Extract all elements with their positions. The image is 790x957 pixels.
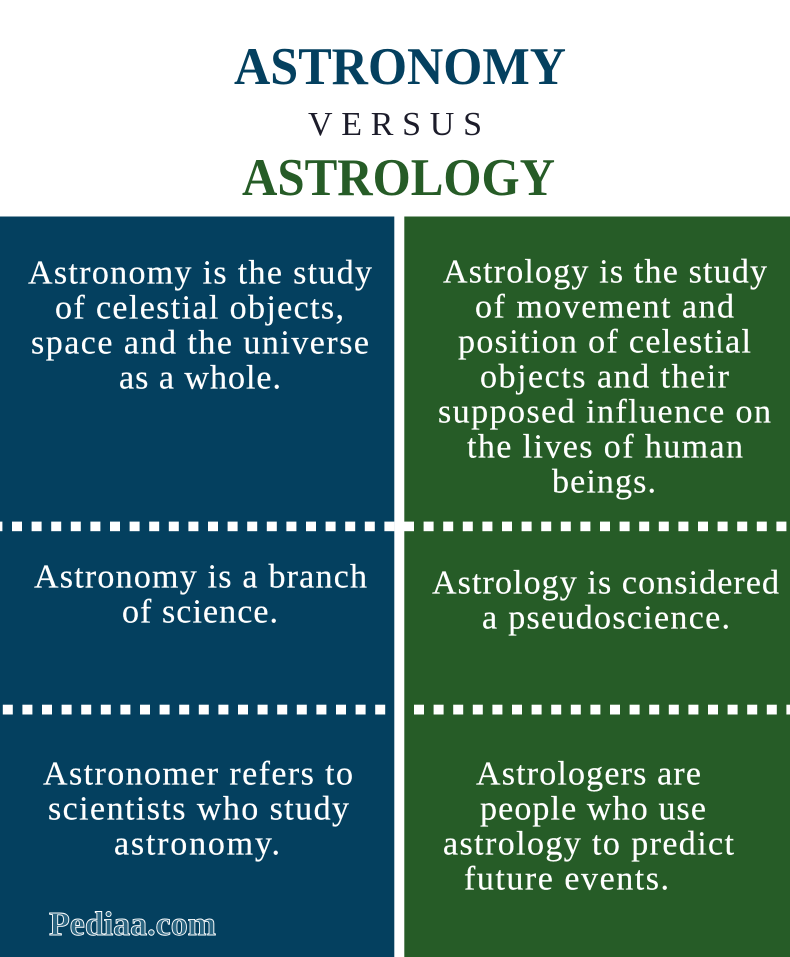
text: astrologer description: future events. <box>464 861 669 898</box>
text: astronomer description: scientists who study <box>48 791 349 828</box>
text: astrologer description: people who use <box>480 791 706 828</box>
text: astronomy definition: as a whole. <box>119 360 281 397</box>
text: astronomer description: Astronomer refers to <box>43 756 353 793</box>
heading: astronomy: ASTRONOMY <box>234 38 566 96</box>
heading: astrology: ASTROLOGY <box>242 149 555 207</box>
text: astronomer description <box>43 756 353 863</box>
text: astrology definition: position of celestial <box>458 324 751 361</box>
text: astronomy is science <box>34 559 367 631</box>
text: astrology definition: supposed influence on <box>438 394 771 431</box>
panel: astronomy column <box>0 216 394 957</box>
text: astronomy is science: of science. <box>122 594 278 631</box>
text: astrology is pseudoscience: a pseudoscience. <box>482 600 730 637</box>
text: astronomy definition <box>28 255 372 397</box>
text: astrology definition: Astrology is the study <box>443 254 767 291</box>
text: astrology is pseudoscience <box>432 565 779 637</box>
dotted divider: lower row <box>3 705 790 714</box>
text: astrologer description <box>443 756 735 898</box>
text: astronomy is science: Astronomy is a branch <box>34 559 367 596</box>
text: astrology definition: objects and their <box>480 359 730 396</box>
text: astrology definition: of movement and <box>475 289 734 326</box>
text: astrology definition: the lives of human <box>467 429 743 466</box>
text: astrologer description: astrology to predict <box>443 826 735 863</box>
text: astrology definition: beings. <box>552 464 656 501</box>
text: astronomy definition: of celestial objects, <box>55 290 344 327</box>
text: astronomy definition: Astronomy is the study <box>28 255 372 292</box>
heading: versus: VERSUS <box>308 106 482 143</box>
panel: astrology column <box>404 216 790 957</box>
title block <box>234 38 566 207</box>
text: astrology definition <box>438 254 771 501</box>
text: astronomy definition: space and the universe <box>31 325 369 362</box>
text: astronomer description: astronomy. <box>114 826 280 863</box>
text: astrologer description: Astrologers are <box>476 756 701 793</box>
dotted divider: upper row <box>0 522 786 531</box>
text: astrology is pseudoscience: Astrology is considered <box>432 565 779 602</box>
brand logo: Pediaa.com: Pediaa.com <box>49 906 216 943</box>
